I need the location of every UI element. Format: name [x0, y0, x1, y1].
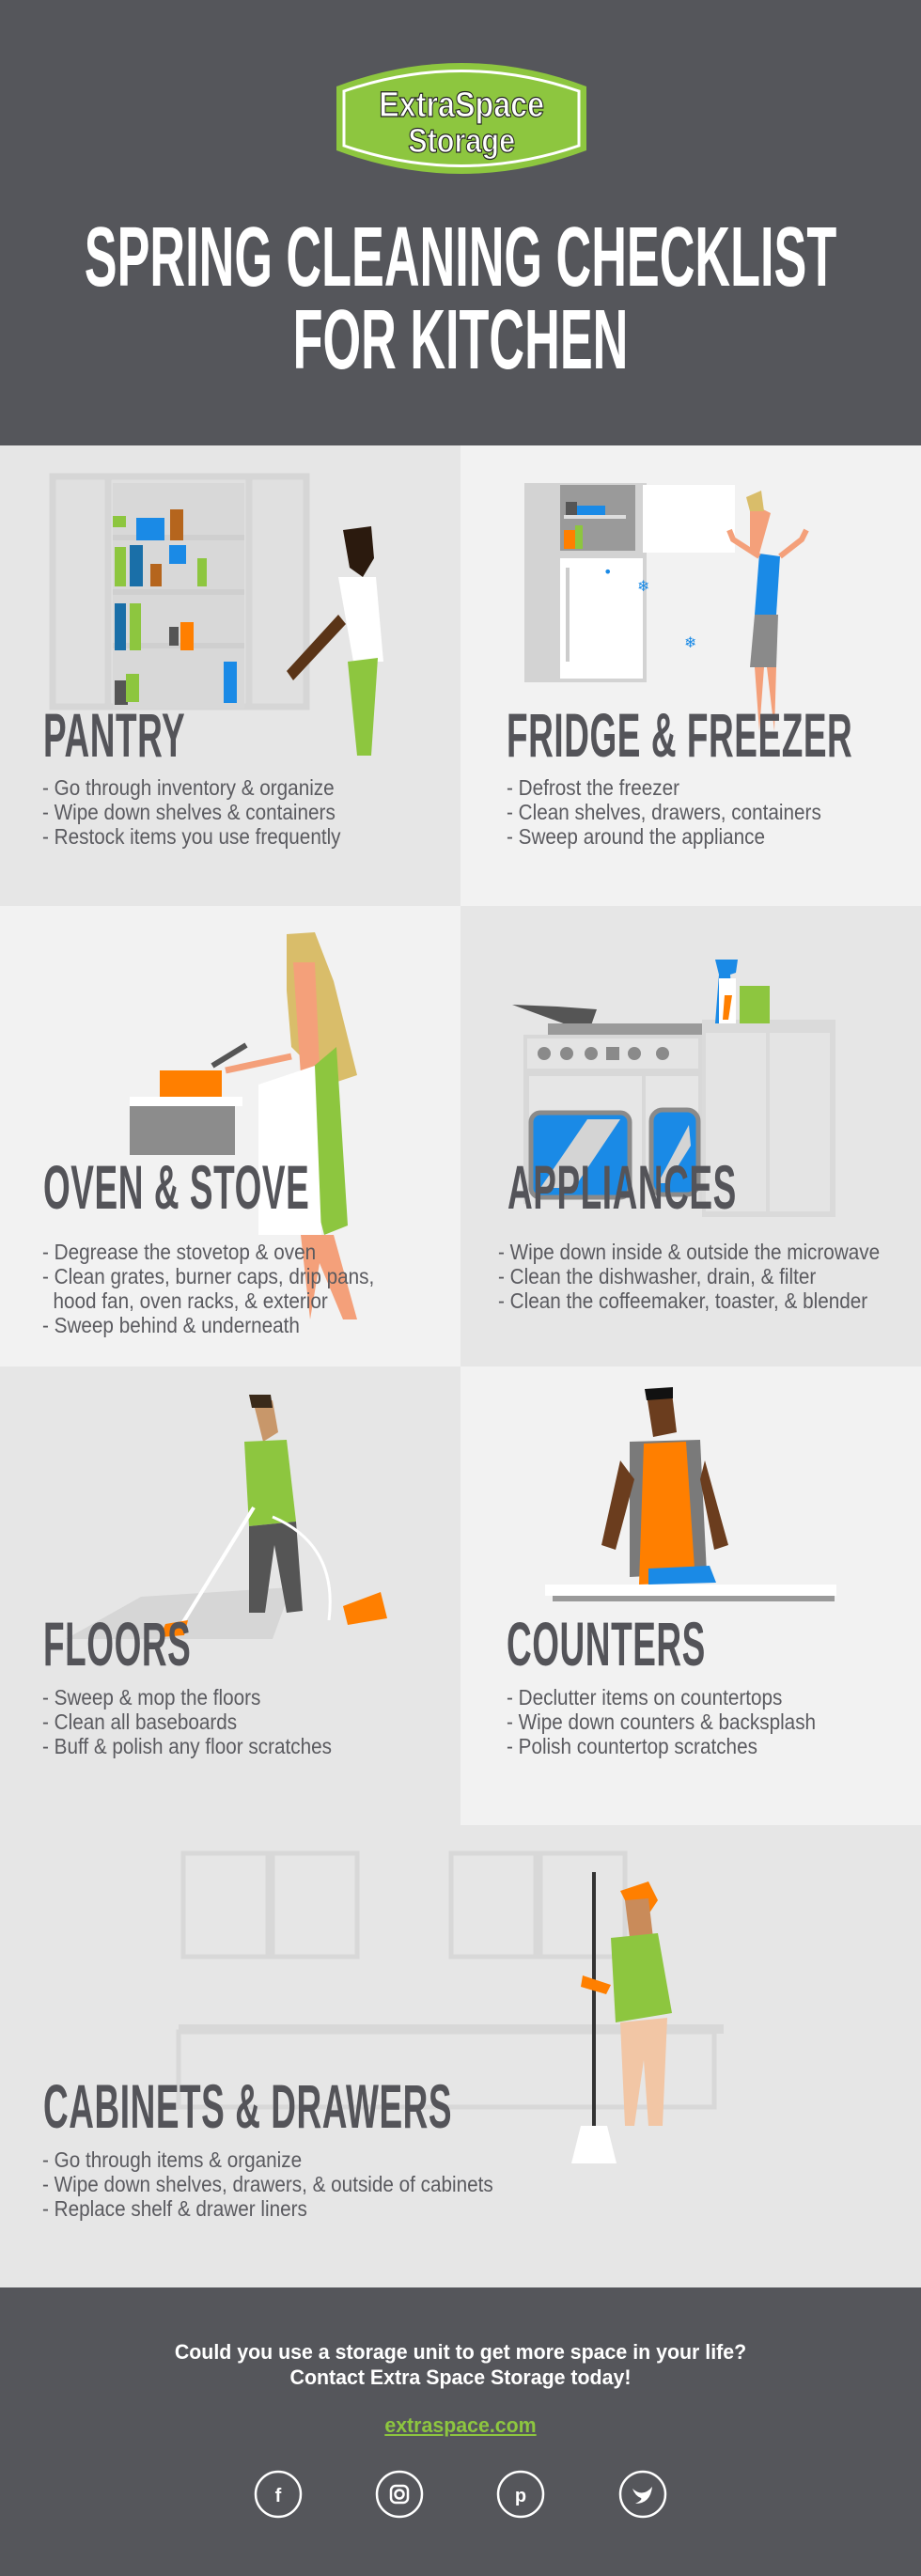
title: FOR KITCHEN	[293, 293, 628, 387]
list: - Degrease the stovetop & oven	[42, 1240, 316, 1264]
heading: OVEN & STOVE	[43, 1152, 309, 1222]
panel: cabinets & drawers	[0, 1825, 921, 2287]
logo: ExtraSpace	[379, 86, 544, 125]
illustration: fridge and man: ❄	[637, 577, 649, 595]
list	[42, 2147, 493, 2221]
list: - Clean shelves, drawers, containers	[507, 800, 821, 824]
illustration: stove, oven and cleaning supplies	[512, 960, 835, 1217]
heading: CABINETS & DRAWERS	[43, 2071, 452, 2141]
list: - Wipe down counters & backsplash	[507, 1710, 816, 1734]
list: - Polish countertop scratches	[507, 1734, 757, 1758]
list	[498, 1240, 880, 1313]
list: - Go through inventory & organize	[42, 775, 335, 800]
panel: floors	[0, 1366, 460, 1825]
panel: pantry	[0, 445, 460, 906]
list: hood fan, oven racks, & exterior	[53, 1288, 328, 1313]
list: - Sweep & mop the floors	[42, 1685, 260, 1710]
list: - Replace shelf & drawer liners	[42, 2196, 307, 2221]
list	[42, 1240, 374, 1337]
panel: oven & stove	[0, 906, 460, 1366]
list: - Clean the dishwasher, drain, & filter	[498, 1264, 816, 1288]
social icons	[254, 2470, 667, 2519]
social icons: f	[275, 2486, 282, 2506]
heading: FLOORS	[43, 1609, 191, 1678]
list: - Wipe down shelves, drawers, & outside of cabinets	[42, 2172, 493, 2196]
heading: COUNTERS	[507, 1609, 706, 1678]
list: - Wipe down shelves & containers	[42, 800, 336, 824]
call to action text: Could you use a storage unit to get more space in your life?	[175, 2340, 746, 2364]
illustration: fridge and man: ❄	[684, 633, 696, 651]
list: - Clean the coffeemaker, toaster, & blender	[498, 1288, 867, 1313]
list: - Go through items & organize	[42, 2147, 302, 2172]
logo	[336, 63, 586, 174]
list: - Wipe down inside & outside the microwave	[498, 1240, 880, 1264]
call to action text	[175, 2340, 746, 2389]
list	[507, 775, 821, 849]
link: extraspace.com	[384, 2413, 537, 2437]
illustration: faint cabinets and woman with mop	[177, 1851, 724, 2163]
heading: PANTRY	[43, 700, 185, 770]
illustration: man wiping counter	[545, 1387, 836, 1601]
call to action text: Contact Extra Space Storage today!	[290, 2365, 631, 2389]
panel: counters	[460, 1366, 921, 1825]
header	[0, 0, 921, 445]
panel: fridge & freezer	[460, 445, 921, 906]
heading: FRIDGE & FREEZER	[507, 700, 852, 770]
list: - Buff & polish any floor scratches	[42, 1734, 332, 1758]
list: - Clean all baseboards	[42, 1710, 237, 1734]
man	[750, 507, 771, 554]
illustration: man vacuuming	[66, 1395, 387, 1639]
illustration: woman cooking	[130, 932, 357, 1319]
footer	[0, 2287, 921, 2576]
list	[42, 775, 341, 849]
social icons: p	[515, 2486, 526, 2506]
title: SPRING CLEANING CHECKLIST	[85, 211, 836, 304]
heading: APPLIANCES	[507, 1152, 737, 1222]
panel: appliances	[460, 906, 921, 1366]
illustration: pantry shelves and woman	[49, 474, 383, 756]
list: - Sweep around the appliance	[507, 824, 765, 849]
illustration: fridge and man: •	[603, 563, 612, 581]
list: - Clean grates, burner caps, drip pans,	[42, 1264, 374, 1288]
list: - Sweep behind & underneath	[42, 1313, 300, 1337]
woman	[343, 526, 374, 577]
logo: Storage	[408, 123, 515, 161]
list	[42, 1685, 332, 1758]
illustration: fridge and man	[524, 483, 809, 731]
title	[85, 211, 836, 387]
list: - Defrost the freezer	[507, 775, 679, 800]
list: - Restock items you use frequently	[42, 824, 341, 849]
list: - Declutter items on countertops	[507, 1685, 782, 1710]
list	[507, 1685, 816, 1758]
